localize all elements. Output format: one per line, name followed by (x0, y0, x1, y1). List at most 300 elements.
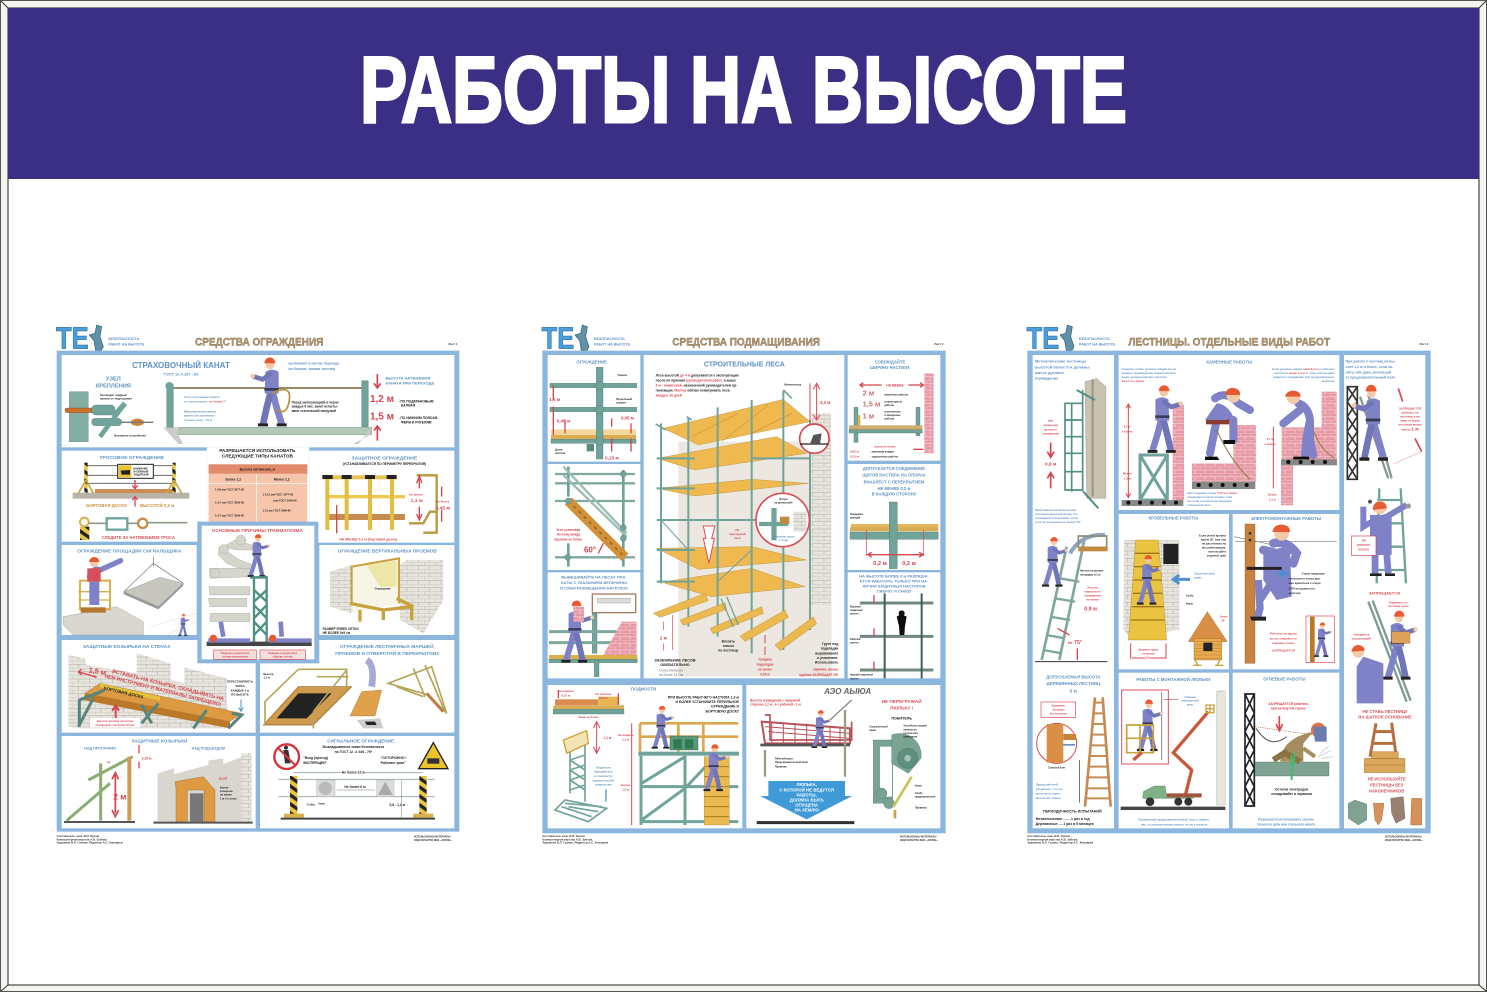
panel: огневые работы: складывайте в корзинки (1271, 792, 1312, 796)
panel: огневые работы (1233, 673, 1339, 828)
panel: лестницы, левая колонка: Не 75° (1068, 640, 1082, 646)
panel: люлька: АЭО АЫЮА (823, 687, 871, 696)
panel: лестницы, правая колонка (1344, 355, 1425, 828)
panel: ограждение (548, 355, 640, 462)
panel: каменные работы: Следите, чтобы уровень кладки после (1122, 367, 1177, 371)
poster 2 logo: ТЕ (542, 321, 574, 355)
rope notes: от горизонтали - не более 7° (184, 399, 227, 403)
welder (1273, 723, 1333, 780)
base boards: выравнивают (815, 651, 839, 655)
panel: защитные козырьки на стенах: козырьков - не более 60 мм (95, 723, 134, 727)
panel: соблюдайте ширину настила: штукатурные (884, 401, 902, 404)
panel: сигнальное ограждение: Не более 12 м (342, 771, 365, 775)
knot illustration: Натяжное устройство (114, 434, 146, 438)
panel: ограждение вертикальных проемов: Ограждение (375, 586, 391, 590)
panel: ограждение вертикальных проемов: НЕ БОЛЕЕ 5х5 см (323, 631, 351, 635)
panel: страховочный канат: СТРАХОВОЧНЫЙ КАНАТ (132, 361, 230, 370)
panel: кровельные работы: канат (1194, 576, 1202, 580)
poster 3: лестницы, отдельные виды работ (1027, 321, 1431, 845)
panel: ограждение: 0,05 м (621, 415, 634, 420)
panel: защитные козырьки: НАД ПРОГАРАМИ (84, 747, 116, 751)
panel: кровельные работы: Скоба (1186, 595, 1194, 598)
panel: лестницы, левая колонка: лестницы (1052, 709, 1064, 712)
top height mark (810, 383, 820, 422)
panel: типы канатов table: 1-9,7 мм ГОСТ 3069-80 (215, 500, 244, 504)
panel: типы канатов table: 1-8,8 мм ГОСТ 3077-80 (215, 488, 244, 492)
panel: соблюдайте ширину настила: 1,5 м (863, 400, 880, 409)
knot illustration: каната от подгорания (100, 397, 132, 401)
panel: защитное ограждение (309, 451, 454, 543)
panel: электромонтажные работы: ЗАПРЕЩАЕТСЯ (1272, 648, 1295, 652)
detail circle: wall tie (756, 493, 809, 547)
panel: тросовое ограждение: ВЫСОТОЙ 0,1 м (140, 503, 174, 508)
poster 3 sheet number: Лист 3 (1419, 342, 1429, 346)
poster 1 credits: ИСПОЛЬЗОВАНЫ МАТЕРИАЛЫ (414, 836, 451, 839)
poster 2: средства подмащивания (542, 321, 946, 845)
turnbuckle (80, 518, 187, 540)
panel: лестницы, левая колонка: иметь дуговое (1035, 370, 1065, 375)
panel: защитное ограждение: (УСТАНАВЛИВАЕТСЯ ПО ПЕРИМЕТРУ ПЕРЕКРЫТИЯ) (343, 462, 426, 466)
panel: соединение щитов настила: 0,2 м (873, 561, 887, 567)
panel: лестницы, левая колонка: убедитесь, что на (1036, 787, 1062, 791)
poster 3 credits: Компьютерная верстка А.В. Зубова (1027, 837, 1078, 841)
detail circle: wall tie: Крепление лесов (772, 534, 795, 538)
base boards: Грунт под (822, 642, 839, 646)
truss and ladder worker (1347, 385, 1392, 479)
suspended slab (123, 557, 183, 609)
callout arrow (757, 781, 854, 823)
panel: защитные козырьки: НАД ПОДЪЕЗДОМ (192, 747, 225, 751)
panel: сигнальное ограждение: "ОСТОРОЖНО ! (381, 756, 406, 760)
callout arrow: ОПУЩЕНА (795, 803, 819, 808)
panel: люлька: ПОБИТЕЛЬ (891, 716, 912, 720)
poster 2 credits (542, 834, 938, 845)
panel: защитные козырьки на стенах: ПЕРЕСТАВЛЯЮТЬ (227, 680, 253, 684)
panel: подмости (548, 685, 742, 828)
panel: люлька: ЛЮЛЬКУ ! (890, 705, 914, 710)
poster 2 credits: Компьютерная верстка А.В. Зубова (542, 837, 593, 841)
panel: электромонтажные работы: нительного пояса дол- (1289, 576, 1321, 580)
panel: ограждение лестничных маршей (260, 640, 454, 733)
panel: соблюдайте ширину настила: работы (884, 403, 895, 407)
panel: подмости: На ширине (618, 733, 634, 737)
panel: соединение щитов настила: вающий (850, 516, 861, 519)
cage ladder (1065, 378, 1106, 508)
panel: строительные леса: леса (734, 536, 741, 540)
base boards (653, 593, 839, 677)
panel: огневые работы: ОГНЕВЫЕ РАБОТЫ (1263, 677, 1305, 682)
panel: огневые работы: Разрешается использовать стропы (1258, 818, 1314, 822)
bricklayer 3: 0,7 м (1267, 437, 1273, 441)
panel: огневые работы: только из цепи или стального каната (1257, 822, 1315, 826)
panel: подмости: параллельной (593, 778, 614, 782)
panel: лестницы, левая колонка: Перед работой (1036, 783, 1058, 787)
panel: лестницы, правая колонка: ЗАПРЕЩАЕТСЯ (1369, 590, 1400, 595)
panel: электромонтажные работы: ЛЭП на уровне ног (1289, 586, 1316, 590)
scaffold tower (555, 740, 607, 822)
tension height note (370, 374, 438, 441)
panel: люлька: НЕ ПЕРЕГРУЖАЙ (882, 697, 922, 704)
panel: строительные леса: СТРОИТЕЛЬНЫЕ ЛЕСА (704, 362, 785, 369)
panel: защитное ограждение: ЗАЩИТНОЕ ОГРАЖДЕНИЕ (351, 455, 418, 461)
panel: кровельные работы: ходовой трап (1207, 554, 1226, 558)
panel: кровельные работы: Уклон (1220, 614, 1228, 618)
rope notes: вают статической нагрузкой (292, 409, 336, 413)
poster 1 credits: ИЗДАТЕЛЬСТВО ИНЖ. «СОЛОН» (414, 839, 452, 842)
panel: соблюдайте ширину настила (848, 355, 940, 461)
deck detail: Зазор не более (578, 715, 599, 719)
panel: лестницы, левая колонка: 0,9 м (1084, 607, 1097, 613)
panel: защитные козырьки на стенах: 1,5 м (88, 665, 107, 677)
panel: соблюдайте ширину настила: ШИРИНУ НАСТИЛА (870, 365, 910, 370)
panel: кровельные работы: используйте (1208, 550, 1226, 554)
panel: защитные козырьки: ЗАЩИТНЫЕ КОЗЫРЬКИ (131, 739, 188, 744)
lying figures (208, 622, 250, 643)
tension height note: ФЕРМ И РИГЕЛЯМ (401, 420, 432, 424)
panel: строительные леса: НЕ (735, 528, 739, 532)
panel: на высоте более 6 м: настил (850, 642, 859, 645)
panel: соблюдайте ширину настила: - каменная кладка (870, 451, 894, 454)
winch (869, 725, 936, 818)
panel: подмости: 1,1 м (603, 736, 612, 740)
panel: сигнальное ограждение (260, 736, 454, 828)
winch: Страховочный (869, 725, 888, 728)
panel: лестницы, левая колонка: Высота (1087, 585, 1098, 589)
callout arrow: РАБОТЫ, (797, 792, 817, 797)
panel: работы с монтажной люльки: Прикрепляй предохранительный пояс к закреп- (1138, 818, 1210, 822)
panel: типы канатов table: 1-12,5 мм ГОСТ 3077-80 (263, 492, 294, 496)
panel: соединение щитов настила (848, 464, 940, 570)
panel: лестницы, правая колонка: При работе с лестниц на вы- (1346, 360, 1396, 364)
tower (254, 577, 267, 645)
panel: лестницы, левая колонка: угол её установки не более 70° (1035, 520, 1082, 524)
panel: лестницы, левая колонка: Приставная металлическая (1035, 508, 1076, 512)
panel: защитные козырьки: не менее (220, 794, 232, 797)
panel: подмости: 1,1 м (622, 738, 629, 742)
panel: каменные работы: на 0,7 м и более (1122, 379, 1145, 383)
panel: работы с монтажной люльки: Главный (1185, 696, 1196, 699)
panel: лестницы, левая колонка: не менее (1086, 597, 1099, 601)
panel: электромонтажные работы: кости, опираясь на (1270, 636, 1297, 640)
rope notes: каждые 6 мес. канат испыты- (292, 405, 338, 409)
panel: приставная лестница (548, 464, 640, 570)
panel: сигнальное ограждение: Работает кран" (381, 761, 406, 765)
poster 1 credits: Художник В.Л. Галкин, Редактор А.С. Комзарев (57, 841, 123, 845)
icon: log house (1188, 612, 1227, 666)
rope notes: Перед эксплуатацией в черно (292, 400, 339, 404)
panel: защитные козырьки: Вылет (220, 785, 229, 789)
panel: ограждение лестничных маршей: Высота (263, 672, 274, 676)
panel: лестницы, правая колонка: ОПАСНО (1358, 549, 1369, 552)
panel: защитные козырьки: 70-75° (218, 777, 228, 781)
panel: защитное ограждение: Не менее (409, 492, 423, 496)
panel: типы канатов table: 1-11 мм ГОСТ 3069-80 (263, 508, 291, 512)
knot illustration (65, 392, 153, 442)
panel: лестницы, правая колонка: ЛЕСТНИЦЫ БЕЗ (1370, 783, 1404, 788)
panel: кровельные работы: КРОВЕЛЬНЫЕ РАБОТЫ (1149, 515, 1198, 520)
lift truck (1121, 690, 1225, 808)
panel: типы канатов table: РАЗРЕШАЕТСЯ ИСПОЛЬЗОВАТЬ (219, 448, 296, 453)
rope notes: (по балкам, трапам, местам) (288, 367, 335, 371)
panel: работы с монтажной люльки: РАБОТЫ С МОНТАЖНОЙ ЛЮЛЬКИ (1136, 677, 1210, 682)
poster 2 logo (542, 321, 631, 355)
ladder tips (1348, 797, 1422, 825)
panel: лестницы, правая колонка: ТАК (1361, 539, 1366, 542)
deck detail: На ширине (558, 689, 574, 693)
panel: приставная лестница: Угол установки (556, 528, 580, 532)
panel: тросовое ограждение: СЛЕДИТЕ ЗА НАТЯЖЕНИЕМ ТРОСА (102, 535, 175, 540)
panel: на высоте более 6 м: настил (850, 613, 859, 616)
panel: кровельные работы: круче 20° или она (1201, 538, 1226, 542)
panel: лестницы, правая колонка: работать на (1402, 410, 1419, 414)
poster 3 credits: ИСПОЛЬЗОВАНЫ МАТЕРИАЛЫ (1385, 836, 1422, 839)
panel: строительные леса (644, 355, 844, 678)
panel: лестницы, левая колонка: ограждения (1042, 432, 1059, 436)
panel: подмости: ПРИ ВЫСОТЕ РАБОЧЕГО НАСТИЛА 1,3 м (668, 695, 739, 699)
bricklayer 3 (1264, 391, 1337, 505)
panel: лестницы, правая колонка: лестнице стоя (1400, 414, 1420, 418)
base boards: Толщина (758, 657, 772, 661)
panel: соблюдайте ширину настила: плотничные (884, 411, 901, 414)
poster 3 credits (1027, 834, 1423, 845)
panel: лестницы, левая колонка: ограждение (1035, 376, 1059, 381)
panel: соединение щитов настила: Поддержи- (850, 513, 864, 516)
panel: подмости: передвигать (594, 770, 613, 774)
panel: лестницы, правая колонка: лестницы менее (1398, 422, 1422, 426)
panel: защитные козырьки на стенах: КАЖДЫЕ 6 м (231, 688, 249, 692)
base boards: по лестнице (718, 649, 739, 653)
panel: типы канатов table: Высота натяжения, м (240, 467, 276, 471)
panel: на высоте более 6 м: НА ВЫСОТЕ БОЛЕЕ 6 м РАЗРЕША- (859, 574, 929, 579)
poster 1 frame (57, 351, 459, 832)
panel: работы с монтажной люльки: страховочный (1181, 700, 1199, 703)
bricklayer 1: Менее (1123, 472, 1132, 476)
panel: лестницы, левая колонка: лестница высотой более 5 м (1035, 512, 1078, 516)
panel: ограждение: 1,1 м (549, 397, 561, 402)
panel: ограждение лестничных маршей: ОГРАЖДЕНИЕ ЛЕСТНИЧНЫХ МАРШЕЙ, (340, 642, 435, 650)
poster 2 credits: ИЗДАТЕЛЬСТВО ИНЖ. «СОЛОН» (900, 839, 938, 842)
tension height note: 1,2 м (370, 394, 394, 405)
panel: ограждение вертикальных проемов: ОГРАЖДЕНИЕ ВЕРТИКАЛЬНЫХ ПРОЕМОВ (338, 549, 437, 554)
tension height note: - ПО ПОДКРАНОВЫМ (398, 399, 434, 403)
panel: защитные козырьки: 1 м от стены (220, 796, 237, 800)
panel: подмости: И БОЛЕЕ УСТАНОВИТЕ ПЕРИЛЬНОЕ (675, 700, 740, 704)
panel: электромонтажные работы: подошву опоры (1272, 641, 1295, 645)
panel: защитные козырьки на стенах: БОРТОВАЯ ДОСКА (103, 685, 145, 700)
panel: кровельные работы: Канат (1186, 602, 1194, 605)
scaffolding note: ганизации. Мастер обязан осматривать леса (656, 388, 730, 392)
base boards: Влезать (722, 640, 735, 644)
panel: на высоте более 6 м: ЕТСЯ РАБОТАТЬ ТОЛЬКО ПРИ НА- (860, 579, 929, 584)
panel: сигнальное ограждение: Не более 6 м (344, 785, 366, 789)
poster 3 logo: ТЕ (1027, 321, 1059, 355)
panel: типы канатов table (207, 447, 309, 522)
panel: каменные работы (1119, 355, 1339, 510)
panel: каменные работы: защитное ограждение или предохранитель- (1273, 375, 1335, 379)
panel: огневые работы: ЗАПРЕЩАЕТСЯ работать (1268, 702, 1308, 706)
panel: на высоте более 6 м: защитный (850, 609, 863, 612)
panel: тросовое ограждение (62, 451, 207, 542)
gondola: Рабочий канат (775, 757, 794, 760)
panel: лестницы, левая колонка: Настил на уровне (1080, 569, 1104, 573)
panel: ограждение: ОГРАЖДЕНИЕ (576, 360, 607, 365)
prohibition sign (274, 744, 299, 769)
panel: тросовое ограждение: ТРОСОВОЕ ОГРАЖДЕНИЕ (99, 455, 165, 461)
panel: вывешивайте на леса плакаты: КАТЫ С УКАЗАНИЕМ ВЕЛИЧИНЫ (561, 580, 627, 585)
panel: ограждение площадки сигнальщика: ОГРАЖДЕНИЕ ПЛОЩАДКИ СИГНАЛЬЩИКА (77, 549, 182, 555)
panel: защитное ограждение: Не более (436, 500, 450, 504)
poster 1 sheet number: Лист 1 (448, 342, 458, 346)
panel: причины травматизма: потери равновесия (222, 656, 248, 659)
panel: каменные работы: КАМЕННЫЕ РАБОТЫ (1206, 360, 1252, 365)
panel: люлька: Высота ограждения с наружной (750, 698, 800, 702)
panel: защитное ограждение: НЕ МЕНЕЕ 0,1 м (бортовая доска) (339, 537, 397, 541)
panel: люлька: стороны 1,2 м , а с рабочей - 1 м (750, 703, 801, 707)
panel: работы с монтажной люльки: лен. в страховочному канату, но не к люльке (1141, 822, 1208, 826)
panel: защитные козырьки на стенах: НЕМ ИНСТРУМЕНТ И МАТЕРИАЛЫ ЗАПРЕЩЕНО! (104, 673, 222, 708)
panel: причины травматизма: ОСНОВНЫЕ ПРИЧИНЫ ТРАВМАТИЗМА (212, 528, 303, 533)
panel: типы канатов table: или ГОСТ 3069-80 (273, 499, 297, 503)
panel: типы канатов table: Менее 1,2 (274, 477, 290, 481)
base boards: не более 15 Ом (659, 673, 684, 677)
scaffolding note (656, 373, 739, 397)
panel: ограждение: Продольный (616, 398, 633, 401)
panel: лестницы, правая колонка: соте 1,2 м и более, если за- (1346, 365, 1394, 369)
rope beam and posts (163, 381, 372, 444)
panel: защитные козырьки: 0,15 м (142, 756, 152, 760)
ladder with sign worker (1363, 488, 1411, 583)
wall (678, 413, 832, 677)
panel: ограждение вертикальных проемов (319, 545, 454, 635)
panel: лестницы, правая колонка: Находиться (1353, 633, 1370, 637)
warning sign: НАЗЕМНЫЙ (133, 471, 148, 474)
panel: сигнальное ограждение: 0,8 - 1,1 м (390, 803, 406, 807)
poster 3 frame (1027, 351, 1431, 833)
panel: каменные работы: Если уровень кладки ниже 0,7 м от рабочего (1272, 367, 1335, 371)
large scaffold (638, 723, 739, 825)
gondola: Привязки (775, 766, 787, 769)
poster 3 heading: ЛЕСТНИЦЫ. ОТДЕЛЬНЫЕ ВИДЫ РАБОТ (1128, 336, 1330, 348)
detail circle: wall tie: на кронштейн (774, 501, 793, 505)
arrow down (703, 526, 715, 563)
panel: соблюдайте ширину настила: каменные работы (884, 392, 909, 396)
panel: лестницы, левая колонка: высотой более 5 м должны (1035, 364, 1090, 369)
tension height note: КАНАТА ПРИ ПЕРЕХОДЕ (386, 381, 434, 386)
panel: лестницы, левая колонка: Применять (1051, 705, 1066, 708)
panel: сигнальное ограждение: СИГНАЛЬНОЕ ОГРАЖДЕНИЕ (327, 739, 394, 744)
warning sign: ВНИМАНИЕ (133, 468, 148, 471)
panel: люлька (746, 685, 940, 828)
panel: сигнальное ограждение: ВОСПРЕЩЕН" (303, 761, 327, 765)
wooden ladder (1085, 697, 1111, 807)
panel: приставная лестница: лестниц между (556, 533, 580, 537)
panel: лестницы, левая колонка: Металлические ........1 раз в год (1036, 817, 1090, 821)
panel: на высоте более 6 м: ЛИЧИИ ЗАЩИТНЫХ НАСТИЛОВ (862, 584, 926, 589)
poster 1 logo: РАБОТ НА ВЫСОТЕ (108, 342, 145, 346)
poster 3 credits: ИЗДАТЕЛЬСТВО ИНЖ. «СОЛОН» (1385, 839, 1423, 842)
panel: соблюдайте ширину настила: 2 м (863, 389, 874, 398)
panel: соблюдайте ширину настила: СОБЛЮДАЙТЕ (875, 360, 905, 365)
panel: соединение щитов настила: 0,2 м (902, 561, 916, 567)
panel: защитные козырьки на стенах: ПО ВЫСОТЕ (231, 693, 249, 697)
rope notes: Угол отклонения каната (184, 395, 220, 399)
base boards: подкладок (757, 662, 774, 666)
callout arrow: С КОТОРОЙ НЕ ВЕДУТСЯ (779, 787, 834, 792)
panel: кровельные работы (1119, 514, 1229, 669)
panel: защитные козырьки: 70° (107, 760, 112, 764)
panel: строительные леса: Молниеотвод (784, 383, 801, 386)
panel: лестницы, правая колонка: ниже от верха (1400, 418, 1420, 422)
panel: лестницы, правая колонка: РАБОТАТЬ (1357, 544, 1371, 547)
panel: вывешивайте на леса плакаты: ВЫВЕШИВАЙТЕ НА ЛЕСАХ ПЛА- (561, 575, 627, 580)
panel: страховочный канат: УЗЕЛ (106, 376, 121, 382)
poster 2 credits: ИСПОЛЬЗОВАНЫ МАТЕРИАЛЫ (900, 836, 937, 839)
panel: работы с монтажной люльки (1119, 673, 1229, 828)
panel: сигнальное ограждение: "Вход (проезд) (303, 756, 328, 760)
panel: лестницы, левая колонка: 5 м (1070, 689, 1078, 694)
panel: кровельные работы: 20° (1221, 618, 1225, 622)
panel: сигнальное ограждение: Стойка (307, 803, 315, 806)
panel: кровельные работы: не менее (1142, 652, 1155, 656)
deck detail: 0,15 м (561, 693, 570, 697)
poster 2 credits: Художник В.Л. Галкин, Редактор А.С. Комзарев (542, 841, 608, 845)
panel: соединение щитов настила: НЕ МЕНЕЕ 0,2 м (878, 486, 910, 491)
poster 2 sheet number: Лист 2 (934, 342, 944, 346)
scaffolding note: 4 м - комиссией, назначенной руководителем ор- (656, 383, 737, 387)
panel: ограждение: настила (555, 452, 566, 455)
panel: страховочный канат: ГОСТ 12.4.107 - 82 (163, 371, 199, 376)
panel: электромонтажные работы: Работать на одном (1270, 632, 1297, 636)
panel: лестницы, правая колонка: няты обе руки, используй- (1346, 370, 1393, 374)
scaffolding note: Леса высотой до 4 м допускаются к эксплуатации (656, 373, 739, 377)
base boards: Сопротивление (659, 668, 683, 672)
panel: лестницы, левая колонка: Шаг (1048, 419, 1054, 423)
panel: лестницы, левая колонка: ограждения (1084, 593, 1101, 597)
panel: подмости: Подмости (596, 765, 611, 769)
panel: защитные козырьки (62, 736, 256, 828)
winch: Привязка (915, 806, 927, 809)
panel: лестницы, левая колонка: элементов (1043, 423, 1058, 427)
panel: лестницы, правая колонка: лестнице грузы (1388, 605, 1409, 608)
panel: электромонтажные работы: Строп предохра- (1302, 572, 1325, 576)
poster 1 logo: БЕЗОПАСНОСТЬ (108, 337, 140, 341)
callout arrow: ДОЛЖНА БЫТЬ (790, 798, 824, 803)
panel: защитные козырьки на стенах: ЗАЩИТНЫЕ КОЗЫРЬКИ НА СТЕНАХ (83, 644, 171, 650)
panel: защитное ограждение: 0,45 м (435, 505, 450, 511)
panel: сигнальное ограждение: Выкладываются знаки безопасности (322, 745, 384, 749)
rope notes: натягивают в местах перехода (288, 362, 339, 366)
tension height note: - ПО НИЖНИМ ПОЯСАМ (398, 416, 438, 420)
detail circle: worker (800, 424, 829, 453)
panel: лестницы, левая колонка: ПЕРИОДИЧНОСТЬ ИСПЫТАНИЙ (1043, 809, 1102, 813)
panel: электромонтажные работы (1233, 514, 1339, 669)
warning triangle (419, 743, 448, 769)
panel: защитные козырьки: 2 м (113, 791, 126, 801)
panel: ограждение: Доски (555, 449, 563, 452)
panel: каменные работы: ный пояс (1322, 379, 1335, 383)
panel: лестницы, левая колонка: Металлические лестницы (1035, 359, 1087, 364)
rope notes: Максимальная длина (184, 409, 216, 413)
panel: ограждение: 0,45 м (557, 418, 571, 423)
gondola (760, 700, 852, 777)
title banner (8, 8, 1479, 179)
base boards: только (723, 644, 734, 648)
panel: каменные работы: каждого перемещения подмостей был (1122, 371, 1176, 375)
winch: канат (869, 729, 877, 732)
warning sign (118, 464, 153, 478)
panel: защитные козырьки на стенах: Высота затяжки настилов (97, 719, 134, 723)
panel: защитные козырьки на стенах: ЧЕРЕЗ (235, 684, 245, 688)
